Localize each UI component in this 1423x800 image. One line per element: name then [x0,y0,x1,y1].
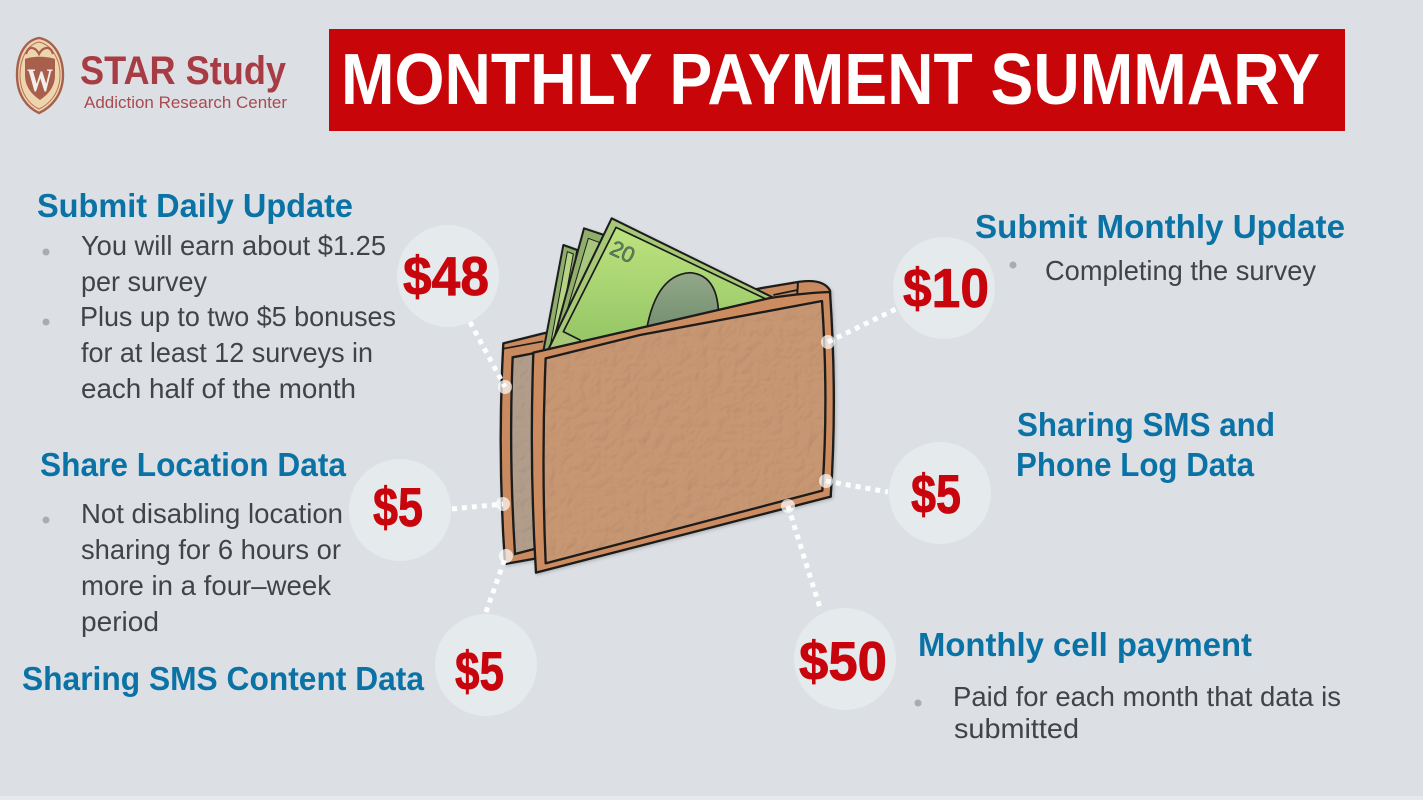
amount badge: $48 [397,225,499,327]
panel: submit daily update [37,187,396,404]
bullet text block: period [81,606,159,637]
amount badge: $50: $50 [799,630,887,692]
bullet text block: submitted [954,713,1079,744]
heading: Share Location Data [40,446,347,483]
wallet flap lines [503,290,797,349]
heading: sharing SMS and phone log data [1016,406,1275,483]
amount badge: $5 SMS content [435,614,537,716]
logo name: STAR Study [80,49,287,93]
heading: Submit Monthly Update [975,208,1345,245]
bullet text block: Not disabling location [81,498,343,529]
amount badge: $5 location: $5 [373,476,423,538]
amount badge: $10 [893,237,995,339]
logo subtitle: Addiction Research Center [84,93,287,112]
heading: sharing SMS content data: Sharing SMS Content Data [22,660,425,697]
heading: sharing SMS and phone log data: Phone Log Data [1016,446,1255,483]
panel: submit monthly update [975,208,1345,286]
wallet leather texture [543,301,825,563]
connector lines and dots [452,307,900,612]
wallet back panel [501,281,831,564]
bullet text block: Paid for each month that data is [953,681,1341,712]
bullet text block [42,498,343,637]
wallet top corner [797,281,830,303]
amount badge: $50 [794,608,896,710]
panel: monthly cell payment [914,626,1341,744]
bullet text: Completing the survey [1045,255,1316,286]
bullet text block: Plus up to two $5 bonuses [80,301,396,332]
amount badge: $5 location [349,459,451,561]
amount badge: $5 phone log [889,442,991,544]
cash bills [540,218,774,367]
logo: STAR Study [17,38,287,113]
heading: Monthly cell payment [918,626,1252,663]
amount badge: $10: $10 [903,257,989,319]
bullet text block: for at least 12 surveys in [81,337,373,368]
title banner: MONTHLY PAYMENT SUMMARY [341,40,1320,120]
heading: Submit Daily Update [37,187,353,224]
amount badge: $48: $48 [403,245,489,307]
heading: sharing SMS and phone log data: Sharing SMS and [1017,406,1275,443]
amount badge: $5 phone log: $5 [911,463,961,525]
wallet front panel [532,292,834,573]
bullet text block [914,681,1341,744]
icon: university crest [17,38,63,113]
icon: university crest: W [27,63,53,99]
bullet text block: per survey [81,266,207,297]
bullet text block: each half of the month [81,373,356,404]
bill denomination: 20 [606,235,639,268]
wallet inner lining [511,353,537,554]
panel: share location data [40,446,347,637]
bullet text block [42,230,396,404]
bullet text block: You will earn about $1.25 [81,230,386,261]
illustration: wallet with cash [501,218,834,573]
amount badge: $5 SMS content: $5 [455,640,504,702]
bullet text block: more in a four–week [81,570,332,601]
bullet text block: sharing for 6 hours or [81,534,341,565]
